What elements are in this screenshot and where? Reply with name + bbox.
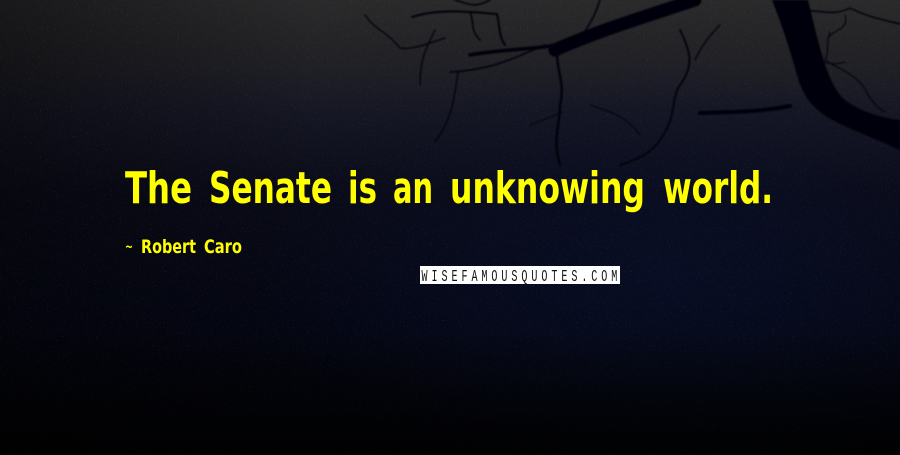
quote text: Senate [209, 163, 332, 214]
tree silhouette [365, 0, 900, 165]
attribution: ~ [125, 240, 133, 255]
attribution [125, 236, 242, 258]
watermark badge: WISEFAMOUSQUOTES.COM [422, 268, 617, 287]
quote text: The [125, 163, 192, 214]
attribution: Robert [141, 236, 196, 258]
quote text: unknowing [450, 163, 645, 214]
quote text: world. [663, 163, 773, 214]
attribution: Caro [204, 236, 242, 258]
quote text: is [348, 163, 377, 214]
quote text: an [393, 163, 433, 214]
quote text [125, 163, 773, 214]
